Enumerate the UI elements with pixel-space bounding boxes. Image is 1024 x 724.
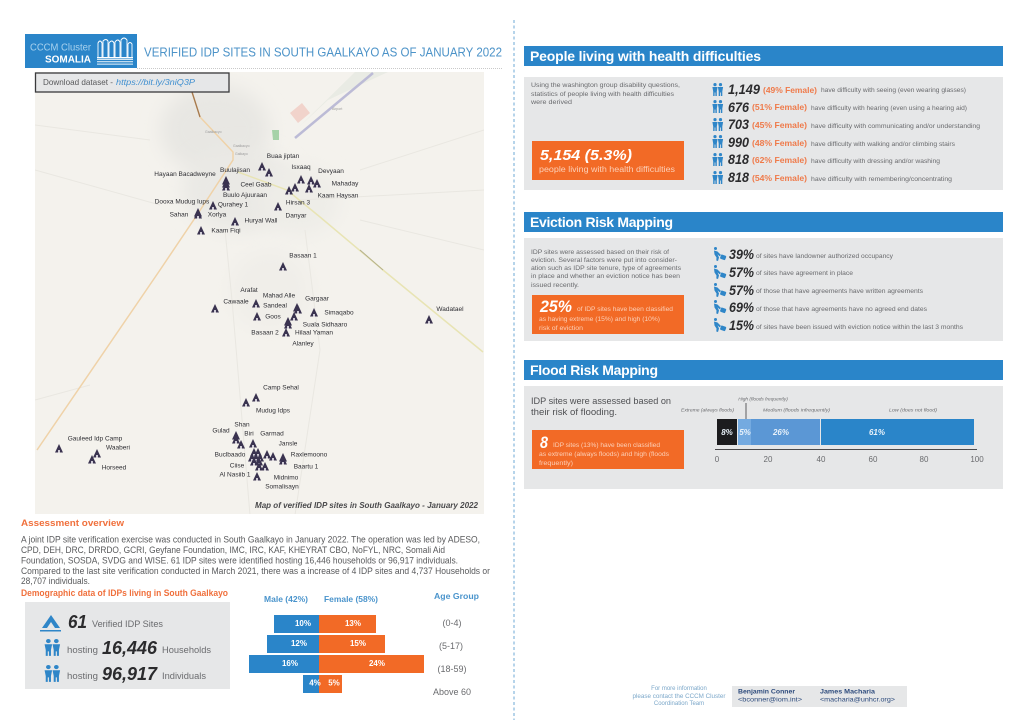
- intro text: [530, 82, 680, 106]
- callout: eviction risk: [532, 295, 684, 334]
- difficulty rows: 676: [728, 99, 749, 115]
- map of verified IDP sites: Gaalkacyo: [233, 144, 250, 148]
- callout: eviction risk: as having extreme (15%) and high (10%): [539, 316, 660, 323]
- panel: flood risk mapping: [524, 360, 1003, 489]
- map site labels: Buclbaado: [215, 452, 246, 458]
- callout: total: 5,154 (5.3%): [540, 147, 632, 164]
- column divider: [513, 20, 515, 720]
- intro text: were derived: [530, 99, 573, 106]
- eviction rows: of sites have landowner authorized occupancy: [756, 253, 894, 260]
- map site labels: Mudug Idps: [256, 408, 291, 414]
- flood risk stacked bar chart: 60: [869, 455, 878, 464]
- population pyramid chart: (5-17): [439, 641, 463, 651]
- map site labels: Garmad: [260, 430, 284, 438]
- difficulty rows: (45% Female): [752, 120, 807, 130]
- map site labels: Xorlya: [208, 212, 227, 218]
- map site labels: Kaam Fiqi: [211, 228, 241, 234]
- map site labels: Ceel Gaab: [240, 182, 272, 188]
- map site labels: Camp Sehal: [263, 384, 299, 392]
- title: VERIFIED IDP SITES IN SOUTH GAALKAYO AS OF JANUARY 2022: [144, 46, 502, 60]
- flood risk stacked bar chart: 0: [715, 455, 720, 464]
- difficulty rows: have difficulty with remembering/concentrating: [811, 176, 953, 183]
- difficulty rows: (62% Female): [752, 155, 807, 165]
- map site labels: Suala Sidhaaro: [303, 322, 348, 328]
- callout: flood risk: IDP sites (13%) have been classified: [553, 442, 660, 449]
- panel: key figures: Households: [162, 645, 212, 655]
- footer: contact note: [632, 686, 726, 707]
- map site labels: Isxaaq: [291, 164, 311, 171]
- flood risk stacked bar chart: 100: [970, 455, 984, 464]
- map site labels: Hirsan 3: [286, 200, 310, 206]
- intro text: their risk of flooding.: [531, 407, 617, 418]
- eviction rows: of sites have agreement in place: [756, 270, 854, 277]
- logo: CCCM Cluster Somalia: CCCM Cluster: [30, 42, 92, 54]
- flood risk stacked bar chart: 40: [817, 455, 826, 464]
- eviction rows: [714, 246, 963, 333]
- panel: key figures: hosting: [67, 645, 98, 655]
- population pyramid chart: Male (42%): [264, 594, 308, 604]
- population pyramid chart: (18-59): [437, 664, 467, 674]
- intro text: statistics of people living with health difficulties: [531, 91, 674, 98]
- population pyramid chart: Female (58%): [324, 594, 378, 604]
- map site labels: Kaam Haysan: [318, 192, 359, 200]
- intro text: IDP sites were assessed based on their risk of: [531, 249, 669, 256]
- map site labels: Goos: [265, 314, 282, 320]
- assessment overview text: 28,707 individuals.: [21, 576, 90, 586]
- intro text: Using the washington group disability questions,: [531, 82, 680, 89]
- assessment overview text: CPD, DEH, DRC, DRRDO, GCRI, Geyfane Foundation, IMC, IRC, KAF, KHEYRAT CBO, NoFYL, NRC, Somali Aid: [21, 545, 445, 555]
- map of verified IDP sites: Galkayo: [235, 152, 248, 156]
- map site labels: Buulo Ajuuraan: [223, 192, 267, 199]
- population pyramid chart: 10%: [295, 619, 311, 628]
- assessment overview text: Compared to the last site verification conducted in March 2021, there was a increase of 4 IDP sites and 4,737 Households or: [21, 566, 490, 576]
- difficulty rows: 990: [728, 134, 749, 150]
- map of verified IDP sites: [35, 72, 484, 515]
- panel: key figures: Individuals: [162, 671, 207, 681]
- map site labels: Sandeal: [263, 302, 287, 310]
- eviction rows: of those that have agreements have written agreements: [756, 288, 923, 295]
- difficulty rows: have difficulty with hearing (even using a hearing aid): [811, 105, 967, 112]
- difficulty rows: (48% Female): [752, 138, 807, 148]
- map site labels: Gauleed Idp Camp: [68, 436, 123, 442]
- map site labels: Wadatael: [436, 306, 464, 313]
- difficulty rows: (51% Female): [752, 102, 807, 112]
- callout: total: people living with health difficulties: [539, 165, 675, 174]
- map site labels: Gulad: [212, 428, 230, 434]
- population pyramid chart: 5%: [328, 678, 340, 688]
- difficulty rows: (54% Female): [752, 173, 807, 183]
- panel: key figures: 61: [68, 612, 87, 632]
- footer: contacts: [732, 686, 907, 707]
- map site labels: Midnimo: [274, 474, 299, 482]
- map site labels: Sahan: [170, 212, 189, 218]
- intro text: [531, 249, 681, 289]
- map caption: Map of verified IDP sites in South Gaalkayo - January 2022: [255, 500, 478, 510]
- heading: Flood Risk Mapping: [530, 362, 658, 378]
- difficulty rows: [712, 81, 981, 185]
- eviction rows: 57%: [729, 264, 754, 280]
- panel: key figures: [25, 602, 230, 689]
- map markers: IDP sites: [55, 162, 433, 480]
- flood risk stacked bar chart: Medium (floods infrequently): [763, 408, 830, 414]
- map site labels: Mahaday: [332, 180, 359, 188]
- map site labels: Horseed: [102, 464, 127, 472]
- map site labels: Danyar: [286, 212, 307, 220]
- panel: eviction risk mapping: [524, 212, 1003, 341]
- eviction rows: 39%: [729, 246, 754, 262]
- assessment overview text: Foundation, SOSDA, SVDG and WISE. 61 IDP sites were identified hosting 16,446 households or 96,917 individuals.: [21, 556, 458, 566]
- panel: key figures: hosting: [67, 671, 98, 681]
- assessment overview heading: Assessment overview: [21, 518, 125, 529]
- eviction rows: of those that have agreements have no agreed end dates: [756, 306, 927, 313]
- map site labels: Somalisayn: [265, 484, 299, 490]
- footer: contacts: <bconner@iom.int>: [738, 696, 802, 704]
- population pyramid chart: 24%: [369, 659, 385, 668]
- map site labels: Buaa jiptan: [267, 153, 300, 160]
- panel: key figures: Verified IDP Sites: [92, 619, 164, 629]
- intro text: ation such as IDP site tenure, type of agreements: [531, 265, 681, 272]
- footer: contact note: Coordination Team: [654, 701, 704, 707]
- map site labels: Biri: [244, 430, 254, 438]
- download dataset box: https://bit.ly/3niQ3P: [116, 77, 195, 87]
- difficulty rows: 703: [728, 116, 749, 132]
- heading: People living with health difficulties: [530, 48, 761, 64]
- footer: contact note: please contact the CCCM Cluster: [632, 694, 726, 700]
- map site labels: Buulajisan: [220, 167, 250, 174]
- population pyramid chart: Age Group: [434, 591, 479, 601]
- callout: flood risk: 8: [540, 433, 548, 452]
- heading: Eviction Risk Mapping: [530, 214, 673, 230]
- map site labels: Simaqabo: [324, 310, 354, 316]
- footer: contacts: James Macharia: [820, 688, 875, 696]
- population pyramid chart: 12%: [291, 639, 307, 648]
- map site labels: Ciise: [230, 462, 245, 470]
- map site labels: Arafat: [240, 287, 258, 294]
- map site labels: Raxlemoono: [291, 452, 328, 458]
- icon: tent: [40, 615, 61, 632]
- flood risk stacked bar chart: 8%: [721, 428, 733, 437]
- callout: eviction risk: risk of eviction: [539, 325, 583, 332]
- download dataset box: Download dataset -: [43, 77, 113, 87]
- map site labels: Baartu 1: [294, 464, 319, 470]
- intro text: issued recently.: [531, 282, 579, 289]
- icon: people households: [45, 639, 60, 656]
- eviction rows: 69%: [729, 299, 754, 315]
- intro text: IDP sites were assessed based on: [531, 396, 671, 407]
- panel: people living with health difficulties: [524, 46, 1003, 190]
- map site labels: Jansle: [279, 440, 298, 448]
- panel: key figures: 16,446: [102, 638, 158, 658]
- map site labels: Dooxa Mudug Iups: [155, 198, 210, 206]
- eviction rows: of sites have been issued with eviction notice within the last 3 months: [756, 324, 963, 331]
- map site labels: [68, 153, 464, 490]
- population pyramid chart: [249, 591, 479, 697]
- population pyramid chart: 16%: [282, 659, 298, 668]
- population pyramid chart: 13%: [345, 619, 361, 628]
- population pyramid chart: (0-4): [442, 618, 462, 628]
- footer: contacts: <macharia@unhcr.org>: [820, 696, 895, 704]
- map site labels: Basaan 1: [289, 252, 317, 260]
- assessment overview text: [21, 534, 490, 586]
- icon: people individuals: [45, 665, 60, 682]
- map site labels: Alanley: [292, 340, 314, 348]
- population pyramid chart: Above 60: [433, 687, 471, 697]
- flood risk stacked bar chart: Low (does not flood): [889, 408, 937, 414]
- map site labels: Huryal Wall: [244, 218, 278, 224]
- map site labels: Waaberi: [106, 444, 130, 452]
- demographic heading: Demographic data of IDPs living in South Gaalkayo: [21, 588, 228, 599]
- logo: CCCM Cluster Somalia: [25, 34, 137, 68]
- map site labels: Shan: [234, 422, 250, 428]
- flood risk stacked bar chart: [681, 396, 984, 464]
- logo: CCCM Cluster Somalia: SOMALIA: [45, 54, 91, 66]
- map site labels: Devyaan: [318, 168, 344, 175]
- panel: key figures: 96,917: [102, 664, 158, 684]
- flood risk stacked bar chart: 26%: [772, 428, 789, 437]
- callout: flood risk: as extreme (always floods) and high (floods: [539, 451, 670, 458]
- intro text: in place and whether an eviction notice has been: [531, 273, 681, 280]
- callout: eviction risk: of IDP sites have been classified: [577, 306, 673, 313]
- flood risk stacked bar chart: Extreme (always floods): [681, 408, 734, 414]
- difficulty rows: 818: [728, 151, 749, 167]
- population pyramid chart: 15%: [350, 639, 366, 648]
- intro text: [531, 396, 671, 418]
- difficulty rows: 1,149: [728, 81, 760, 97]
- map site labels: Hilaal Yaman: [295, 330, 333, 336]
- callout: total: [532, 141, 684, 180]
- callout: eviction risk: 25%: [539, 297, 572, 316]
- map of verified IDP sites: Gaalkacyo: [205, 130, 222, 134]
- download dataset box: [36, 73, 229, 92]
- map site labels: Mahad Alle: [263, 292, 295, 300]
- eviction rows: 57%: [729, 282, 754, 298]
- difficulty rows: have difficulty with dressing and/or washing: [811, 158, 941, 165]
- intro text: eviction. Several factors were put into consider-: [531, 257, 677, 264]
- map site labels: Qurahey 1: [218, 202, 249, 208]
- map site labels: Gargaar: [305, 296, 330, 302]
- map site labels: Cawaale: [223, 298, 249, 306]
- assessment overview text: A joint IDP site verification exercise was conducted in South Gaalkayo in January 2022. The operation was led by ADESO,: [21, 534, 480, 544]
- difficulty rows: have difficulty with seeing (even wearing glasses): [821, 87, 966, 94]
- difficulty rows: have difficulty with communicating and/or understanding: [811, 123, 981, 130]
- flood risk stacked bar chart: 80: [920, 455, 929, 464]
- map site labels: Hayaan Bacadweyne: [154, 171, 216, 178]
- map site labels: Basaan 2: [251, 330, 279, 336]
- difficulty rows: 818: [728, 169, 749, 185]
- population pyramid chart: 4%: [309, 678, 321, 688]
- flood risk stacked bar chart: 5%: [739, 428, 751, 437]
- map site labels: Al Nasiib 1: [219, 472, 251, 478]
- footer: contacts: Benjamin Conner: [738, 688, 795, 696]
- flood risk stacked bar chart: High (floods frequently): [738, 396, 788, 402]
- flood risk stacked bar chart: 20: [764, 455, 773, 464]
- footer: contact note: For more information: [651, 686, 707, 692]
- difficulty rows: have difficulty with walking and/or climbing stairs: [811, 141, 955, 148]
- difficulty rows: (49% Female): [763, 85, 817, 95]
- callout: flood risk: [532, 430, 684, 469]
- eviction rows: 15%: [729, 317, 754, 333]
- flood risk stacked bar chart: 61%: [869, 428, 885, 437]
- callout: flood risk: frequently): [539, 460, 573, 467]
- map of verified IDP sites: Airport: [332, 107, 342, 111]
